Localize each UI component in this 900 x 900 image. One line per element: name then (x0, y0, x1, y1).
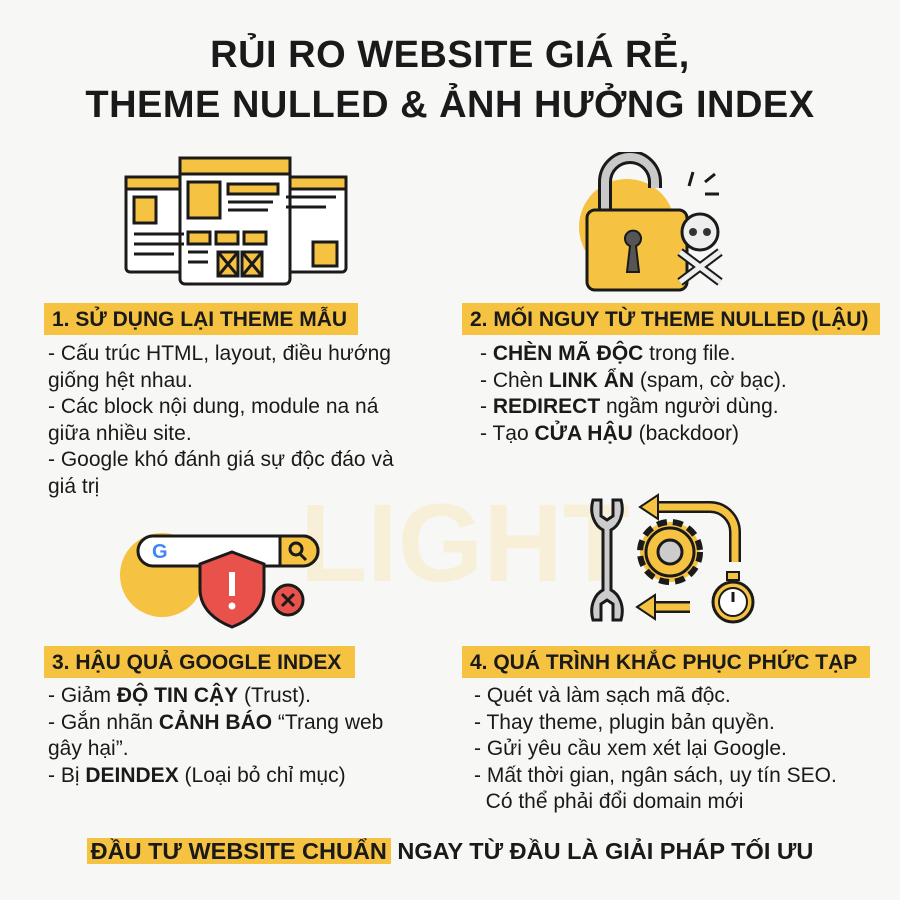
label 4: 4. QUÁ TRÌNH KHẮC PHỤC PHỨC TẠP (470, 651, 857, 674)
label 2: 2. MỐI NGUY TỪ THEME NULLED (LẬU) (470, 308, 869, 331)
title: THEME NULLED & ẢNH HƯỞNG INDEX (85, 84, 815, 126)
text 4: - Mất thời gian, ngân sách, uy tín SEO. (474, 764, 837, 786)
icon: website templates (124, 156, 348, 286)
text 3: - Giảm ĐỘ TIN CẬY (Trust). (48, 684, 311, 707)
text 4 (474, 684, 837, 813)
label 3: 3. HẬU QUẢ GOOGLE INDEX (52, 651, 341, 674)
text 4: Có thể phải đổi domain mới (486, 790, 743, 813)
text 2: - CHÈN MÃ ĐỘC trong file. (480, 342, 736, 365)
text 3: gây hại”. (48, 737, 129, 760)
label 4 (462, 646, 870, 678)
text 3 (48, 682, 383, 786)
title (85, 33, 815, 126)
icon: broken lock with skull (579, 152, 723, 292)
watermark: LIGHT (300, 482, 630, 605)
text 1: - Google khó đánh giá sự độc đáo và (48, 448, 394, 471)
text 2: - Chèn LINK ẨN (spam, cờ bạc). (480, 368, 787, 392)
label 1 (44, 303, 358, 335)
conclusion: ĐẦU TƯ WEBSITE CHUẨN NGAY TỪ ĐẦU LÀ GIẢI PHÁP TỐI ƯU (91, 838, 813, 864)
text 1: - Cấu trúc HTML, layout, điều hướng (48, 342, 391, 365)
text 3: - Bị DEINDEX (Loại bỏ chỉ mục) (48, 764, 346, 786)
text 2: - Tạo CỬA HẬU (backdoor) (480, 422, 739, 444)
text 1: giống hệt nhau. (48, 368, 193, 392)
text 1: - Các block nội dung, module na ná (48, 395, 378, 418)
text 4: - Quét và làm sạch mã độc. (474, 684, 731, 707)
text 1 (48, 342, 394, 498)
title: RỦI RO WEBSITE GIÁ RẺ, (210, 34, 690, 76)
text 3: - Gắn nhãn CẢNH BÁO “Trang web (48, 710, 383, 734)
icon: tools, gear, stopwatch (590, 493, 754, 624)
text 1: giữa nhiều site. (48, 422, 192, 444)
text 2 (480, 340, 787, 444)
label 1: 1. SỬ DỤNG LẠI THEME MẪU (52, 308, 347, 331)
text 4: - Thay theme, plugin bản quyền. (474, 710, 775, 734)
icon: google search warning: G (152, 541, 168, 563)
label 3 (44, 646, 355, 678)
label 2 (462, 303, 880, 335)
text 2: - REDIRECT ngầm người dùng. (480, 395, 779, 418)
text 1: giá trị (48, 474, 99, 498)
icon: google search warning (120, 533, 320, 629)
text 4: - Gửi yêu cầu xem xét lại Google. (474, 737, 787, 760)
